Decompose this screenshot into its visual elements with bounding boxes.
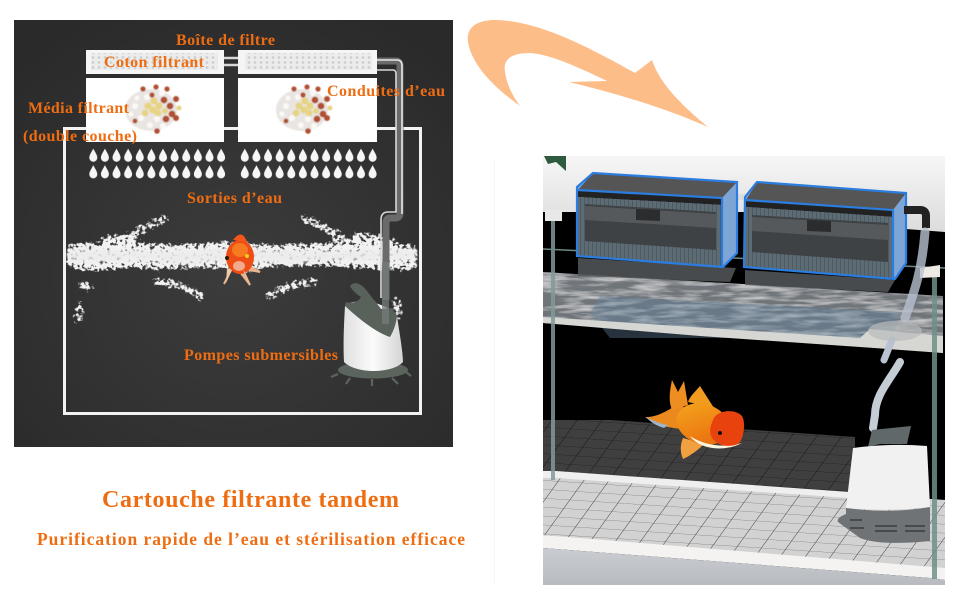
plant leaf xyxy=(544,156,566,171)
rear white ledge xyxy=(543,471,850,498)
goldfish xyxy=(645,380,744,459)
water drops: left xyxy=(88,148,227,181)
subheading: purification: Purification rapide de l’eau et stérilisation efficace xyxy=(37,529,465,549)
water splash band xyxy=(66,216,418,326)
connector between filters xyxy=(730,194,748,200)
filter box: right cotton layer xyxy=(238,50,377,74)
clear hose xyxy=(873,232,925,428)
label: Conduites d'eau: Conduites d’eau xyxy=(327,83,445,100)
water drops: right xyxy=(239,148,378,181)
background wall xyxy=(543,156,945,232)
arrow xyxy=(468,20,708,127)
outlet elbow pipe xyxy=(904,210,926,228)
water falling from filters xyxy=(578,258,895,292)
panel: filtration diagram xyxy=(14,20,453,447)
heading: Cartouche filtrante tandem: Cartouche filtrante tandem xyxy=(102,487,399,513)
filter media: left xyxy=(86,78,224,142)
label: Pompes submersibles: Pompes submersibles xyxy=(184,347,338,364)
water surface xyxy=(543,272,943,353)
filter box: left cotton layer xyxy=(86,50,224,74)
filter unit: right xyxy=(744,182,906,279)
label: double couche: (double couche) xyxy=(23,128,137,145)
pale floor grid xyxy=(543,471,945,573)
panel: aquarium photo xyxy=(494,156,945,585)
tank outline xyxy=(64,128,420,414)
glass posts xyxy=(543,210,945,579)
icon: goldfish xyxy=(224,234,260,285)
label: Média filtrant: Média filtrant xyxy=(28,100,130,117)
white rim of the water line xyxy=(543,317,943,353)
label: Boîte de filtre: Boîte de filtre xyxy=(176,32,275,49)
bracket: left xyxy=(545,210,562,221)
icon: submersible pump xyxy=(331,262,411,386)
submerged blue grid reflection xyxy=(590,296,900,338)
filter media: right xyxy=(238,78,377,142)
bracket: right xyxy=(920,265,940,278)
front white ledge xyxy=(543,535,945,580)
base shadow xyxy=(543,548,945,585)
connecting pipes between boxes xyxy=(224,58,238,65)
dark rear floor xyxy=(543,420,855,497)
label: Sorties d'eau: Sorties d’eau xyxy=(187,190,282,207)
label: Coton filtrant: Coton filtrant xyxy=(104,54,205,71)
hose clip ring xyxy=(868,321,922,341)
water pipe xyxy=(377,60,402,300)
submersible pump xyxy=(838,426,930,543)
filter unit: left xyxy=(577,173,737,267)
